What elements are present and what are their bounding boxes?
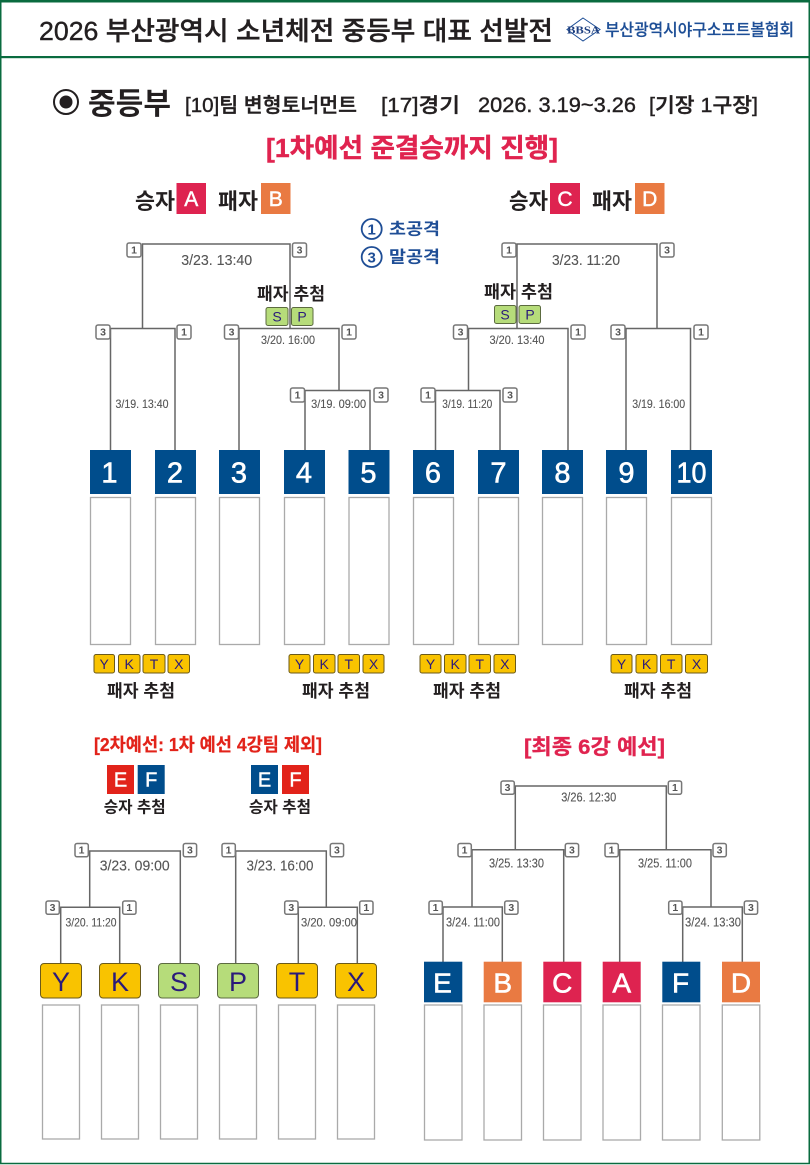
- bracket: second preliminary: 3/20. 11:20: [66, 916, 117, 930]
- bracket: first preliminary right: 1: [575, 327, 581, 339]
- loser draw S P left: 패자 추첨: [257, 284, 325, 304]
- winner draw E F right: F: [289, 770, 302, 792]
- loser draw chips group 1: X: [174, 656, 184, 672]
- loser draw chips group 3: [420, 654, 516, 701]
- bracket: second preliminary: 3/20. 09:00: [301, 916, 357, 930]
- winner and loser labels C D: [509, 183, 664, 214]
- team boxes 1 to 10: 10: [676, 458, 706, 490]
- winner draw E F right: E: [258, 770, 271, 792]
- team boxes E B C A F D: F: [672, 968, 689, 998]
- team boxes 1 to 10: 3: [231, 458, 247, 490]
- loser draw chips group 1: 패자 추첨: [107, 681, 175, 701]
- winner and loser labels A B: 패자: [218, 189, 258, 214]
- loser draw S P right: P: [525, 306, 535, 322]
- bracket: first preliminary left: [96, 243, 388, 450]
- loser draw chips group 3: Y: [426, 656, 436, 672]
- legend: attack order: 3: [368, 250, 376, 266]
- bracket: final six: 3/25. 11:00: [638, 856, 692, 870]
- loser draw chips group 1: K: [125, 656, 135, 672]
- team boxes 1 to 10: 7: [490, 458, 507, 490]
- bracket: first preliminary left: 3: [297, 245, 303, 257]
- winner and loser labels A B: B: [269, 188, 283, 211]
- bracket: first preliminary right: 3/19. 11:20: [442, 397, 493, 411]
- section header: middle school: 2026. 3.19~3.26: [478, 94, 636, 117]
- loser draw chips group 3: K: [451, 656, 461, 672]
- bracket: final six: 1: [609, 845, 615, 857]
- bracket: first preliminary right: 1: [506, 245, 512, 257]
- bracket: first preliminary right: 3: [615, 327, 621, 339]
- team chips Y K S P T X: Y: [52, 967, 70, 997]
- winner draw E F left: [104, 765, 166, 816]
- team chips Y K S P T X: X: [347, 967, 365, 997]
- loser draw chips group 1: [94, 654, 190, 701]
- bracket: first preliminary left: 3: [229, 327, 235, 339]
- team boxes 1 to 10: [90, 450, 712, 494]
- bracket: first preliminary left: 3: [100, 327, 106, 339]
- empty result boxes final six: [424, 1005, 760, 1140]
- loser draw chips group 4: X: [692, 656, 702, 672]
- team boxes E B C A F D: C: [552, 968, 572, 998]
- bracket: final six: 3/25. 13:30: [489, 856, 544, 870]
- team chips Y K S P T X: P: [229, 967, 247, 997]
- loser draw chips group 1: T: [150, 656, 159, 672]
- bracket: final six: 3: [505, 782, 511, 794]
- loser draw S P right: 패자 추첨: [484, 282, 553, 302]
- bracket: first preliminary left: 1: [131, 245, 137, 257]
- loser draw chips group 3: 패자 추첨: [433, 681, 501, 701]
- bracket: first preliminary right: 3/19. 16:00: [632, 397, 685, 411]
- winner draw E F left: E: [114, 770, 127, 792]
- bracket: second preliminary: 1: [126, 902, 132, 914]
- team boxes E B C A F D: D: [731, 968, 751, 998]
- team boxes E B C A F D: B: [493, 968, 512, 998]
- bracket: second preliminary: 1: [79, 845, 85, 857]
- bracket: first preliminary left: 3/19. 09:00: [311, 397, 366, 411]
- team boxes 1 to 10: 8: [554, 458, 571, 490]
- team boxes E B C A F D: [424, 962, 760, 1002]
- team boxes 1 to 10: 5: [360, 458, 377, 490]
- bracket: second preliminary: 1: [363, 902, 369, 914]
- title: 2026 부산광역시 소년체전 중등부 대표 선발전: [39, 16, 553, 46]
- winner and loser labels A B: 승자: [135, 189, 175, 214]
- bracket: first preliminary left: 1: [295, 390, 301, 402]
- section header: middle school: [54, 88, 758, 121]
- bracket: first preliminary right: 1: [698, 327, 704, 339]
- section header: middle school: [10]팀 변형토너먼트: [185, 94, 357, 117]
- loser draw chips group 4: Y: [617, 656, 627, 672]
- bracket: final six: 1: [672, 782, 678, 794]
- team boxes 1 to 10: 6: [425, 458, 441, 490]
- loser draw chips group 1: Y: [100, 656, 110, 672]
- bracket: second preliminary: 3: [50, 902, 56, 914]
- loser draw chips group 2: K: [320, 656, 330, 672]
- bracket: final six: 3: [569, 845, 575, 857]
- bracket: final six: 1: [672, 902, 678, 914]
- bracket: second preliminary: 3: [187, 845, 193, 857]
- bracket: second preliminary: 3/23. 09:00: [100, 858, 170, 874]
- bracket: final six: 1: [433, 902, 439, 914]
- heading: final six: [최종 6강 예선]: [524, 736, 665, 759]
- logo: BBSA: 부산광역시야구소프트볼협회: [605, 20, 794, 40]
- bracket: first preliminary right: 3/23. 11:20: [552, 252, 620, 269]
- loser draw chips group 2: 패자 추첨: [302, 681, 370, 701]
- team chips Y K S P T X: K: [111, 967, 129, 997]
- bracket: final six: 3/26. 12:30: [561, 790, 616, 804]
- icon: target bullet: [54, 90, 78, 114]
- bracket: final six: 3/24. 13:30: [685, 916, 741, 930]
- bracket: first preliminary left: 3: [378, 390, 384, 402]
- bracket: first preliminary left: 3/23. 13:40: [181, 252, 252, 269]
- bracket: final six: 3: [748, 902, 754, 914]
- section header: middle school: [17]경기: [381, 94, 460, 117]
- section header: middle school: [기장 1구장]: [649, 94, 758, 117]
- bracket: second preliminary: 1: [226, 845, 232, 857]
- team chips Y K S P T X: S: [170, 967, 188, 997]
- bracket: first preliminary right: 3/20. 13:40: [490, 333, 545, 347]
- bracket: second preliminary: 3: [288, 902, 294, 914]
- bracket: final six: 3: [717, 845, 723, 857]
- team boxes E B C A F D: A: [612, 968, 631, 998]
- team boxes 1 to 10: 1: [101, 458, 118, 490]
- loser draw chips group 4: T: [667, 656, 676, 672]
- bracket: first preliminary right: 3: [507, 390, 513, 402]
- loser draw S P right: [484, 282, 553, 324]
- loser draw S P left: S: [272, 308, 282, 324]
- loser draw S P left: [257, 284, 325, 326]
- bracket: first preliminary right: 1: [425, 390, 431, 402]
- legend: attack order: 초공격: [389, 220, 440, 238]
- winner and loser labels C D: C: [557, 188, 573, 211]
- team boxes 1 to 10: 4: [296, 458, 312, 490]
- winner draw E F left: F: [145, 770, 157, 792]
- bracket: final six: 3/24. 11:00: [446, 916, 500, 930]
- legend: attack order: 말공격: [389, 248, 440, 266]
- team boxes 1 to 10: 9: [618, 458, 635, 490]
- team chips Y K S P T X: [40, 964, 376, 998]
- winner and loser labels A B: [135, 183, 290, 214]
- winner draw E F right: 승자 추첨: [249, 798, 311, 816]
- heading: first preliminary: [1차예선 준결승까지 진행]: [266, 133, 558, 163]
- bracket: second preliminary: 3/23. 16:00: [246, 858, 314, 874]
- loser draw chips group 4: [611, 654, 708, 701]
- bracket: second preliminary: 3: [334, 845, 340, 857]
- winner and loser labels C D: D: [642, 188, 657, 211]
- loser draw chips group 4: 패자 추첨: [624, 681, 692, 701]
- winner draw E F right: [249, 765, 311, 816]
- logo: BBSA: [567, 18, 794, 41]
- winner and loser labels C D: 승자: [509, 189, 548, 214]
- winner and loser labels C D: 패자: [592, 189, 632, 214]
- loser draw chips group 2: T: [345, 656, 354, 672]
- loser draw chips group 2: X: [369, 656, 379, 672]
- team chips Y K S P T X: T: [289, 967, 305, 997]
- loser draw S P right: S: [500, 306, 510, 322]
- loser draw chips group 3: X: [500, 656, 510, 672]
- legend: attack order: 1: [368, 222, 376, 238]
- team boxes E B C A F D: E: [433, 968, 452, 998]
- bracket: first preliminary right: 3: [664, 245, 670, 257]
- empty result boxes second preliminary: [42, 1005, 374, 1139]
- winner and loser labels A B: A: [184, 188, 198, 211]
- loser draw chips group 4: K: [642, 656, 652, 672]
- loser draw chips group 2: [289, 654, 384, 701]
- section header: middle school: 중등부: [88, 88, 171, 121]
- bracket: first preliminary right: [421, 243, 708, 450]
- heading: second preliminary: [2차예선: 1차 예선 4강팀 제외]: [94, 735, 322, 755]
- bracket: first preliminary left: 3/20. 16:00: [261, 333, 315, 347]
- loser draw chips group 2: Y: [295, 656, 305, 672]
- loser draw chips group 3: T: [476, 656, 485, 672]
- bracket: final six: 1: [462, 845, 468, 857]
- loser draw S P left: P: [297, 308, 307, 324]
- bracket: first preliminary left: 1: [181, 327, 187, 339]
- team boxes 1 to 10: 2: [167, 458, 183, 490]
- legend: attack order: [362, 219, 440, 267]
- logo: BBSA: BBSA: [567, 24, 600, 36]
- bracket: first preliminary left: 1: [346, 327, 352, 339]
- empty result boxes top row: [90, 498, 712, 644]
- bracket: final six: [429, 781, 758, 962]
- bracket: first preliminary left: 3/19. 13:40: [116, 397, 169, 411]
- winner draw E F left: 승자 추첨: [104, 798, 166, 816]
- bracket: final six: 3: [508, 902, 514, 914]
- bracket: second preliminary: [46, 844, 373, 963]
- bracket: first preliminary right: 3: [458, 327, 464, 339]
